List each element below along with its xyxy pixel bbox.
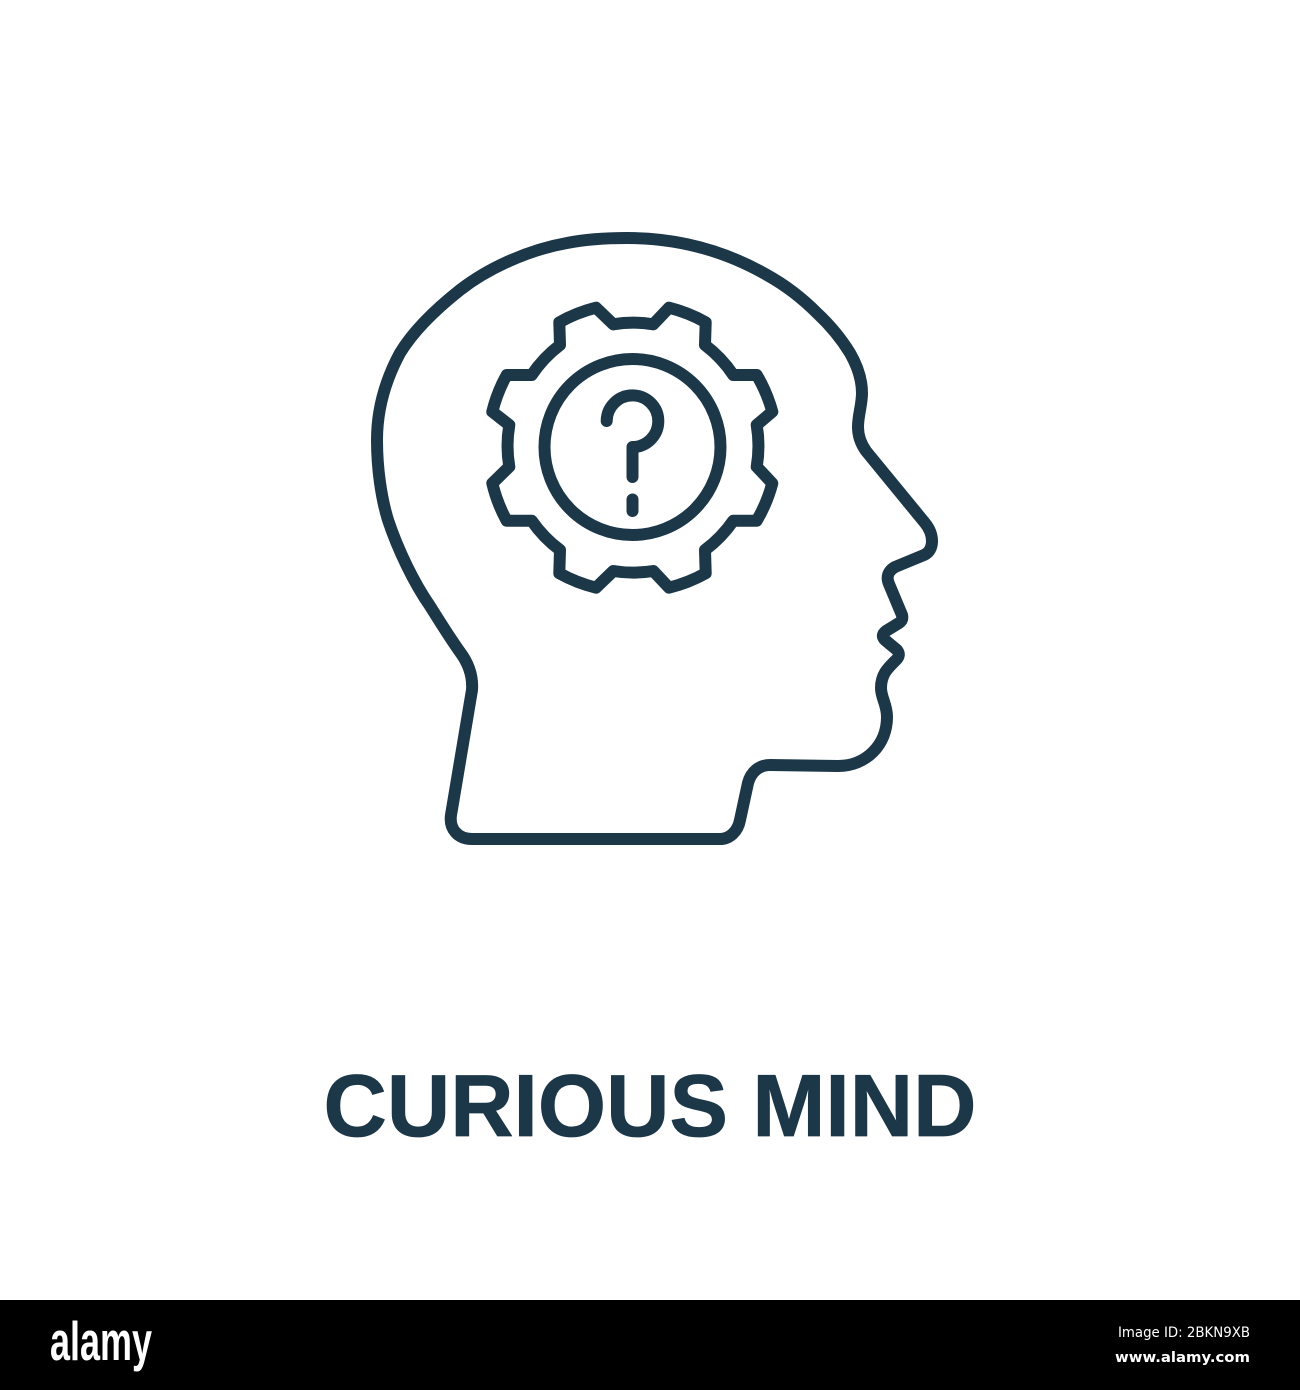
title: CURIOUS MIND [324,1056,976,1155]
icon: head profile outline [377,238,932,839]
icon: head with gear and question mark [377,238,932,839]
text: website: www.alamy.com [1115,1350,1250,1366]
footer band [0,1300,1300,1390]
icon: question mark [607,395,658,511]
icon: gear outline [492,308,772,588]
logo: alamy: alamy [50,1310,152,1372]
icon: gear inner circle [544,359,720,535]
text: image id: Image ID: 2BKN9XB [1118,1325,1250,1341]
